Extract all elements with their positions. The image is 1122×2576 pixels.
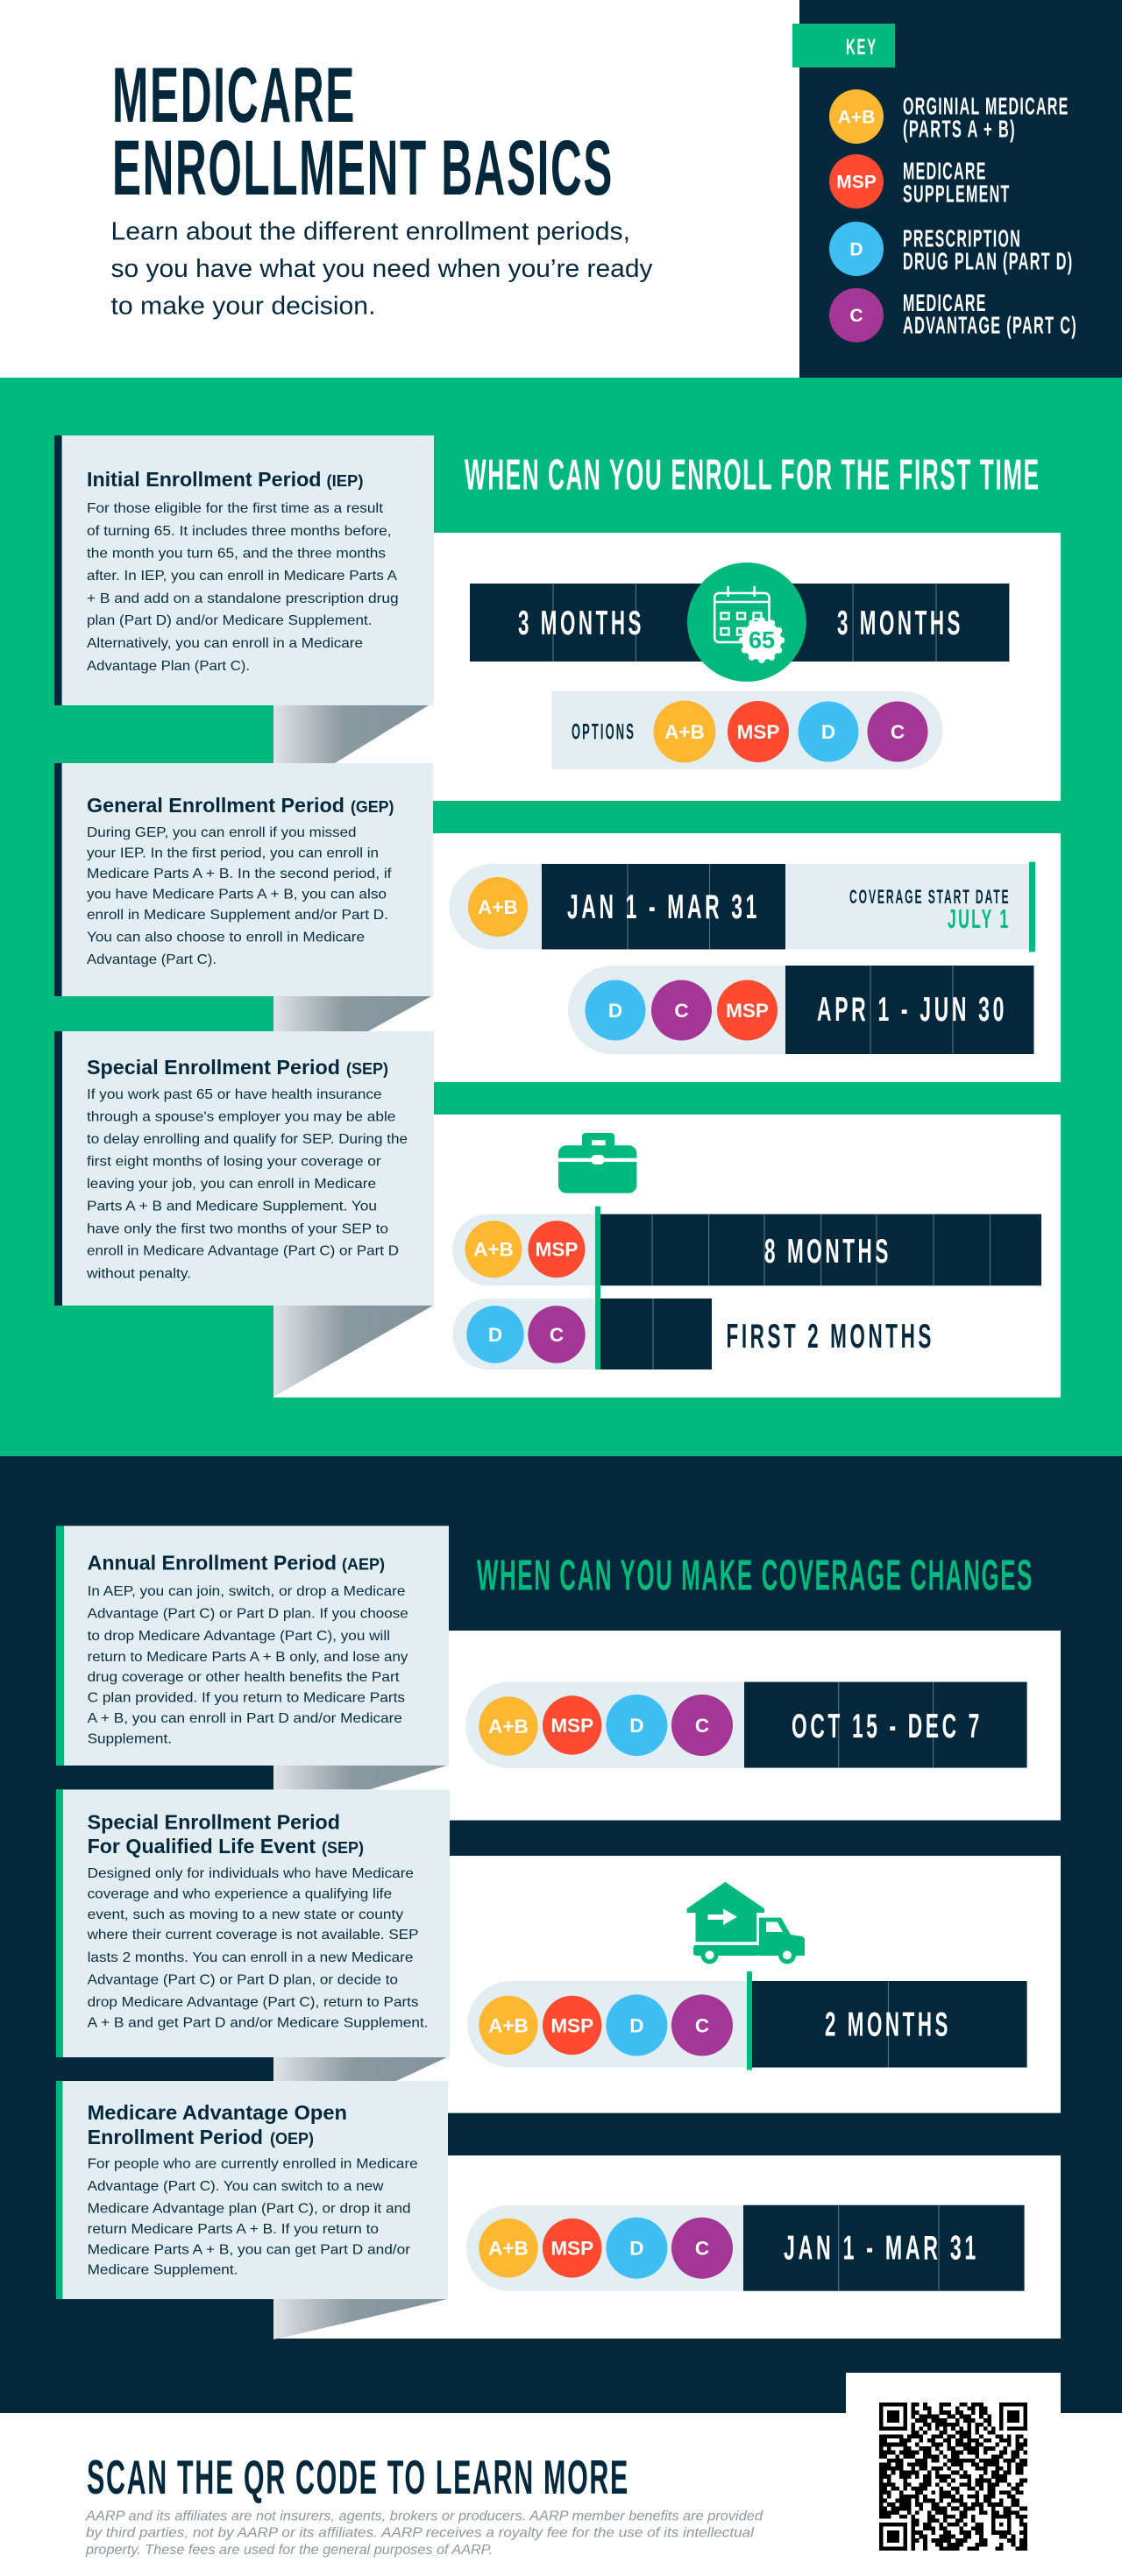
card: Special Enrollment Period (54, 1031, 434, 1306)
row: all plans Oct 15 to Dec 7: A+B (488, 1716, 529, 1737)
card body: drop Medicare Advantage (Part C), return to Parts (88, 1995, 419, 2010)
card body: + B and add on a standalone prescription drug (87, 591, 399, 606)
card: Medicare Advantage Open Enrollment Period (56, 2081, 448, 2299)
card body: drug coverage or other health benefits the Part (88, 1670, 400, 1685)
key item: medicare advantage (829, 288, 1077, 343)
card body: return Medicare Parts A + B. If you return to (88, 2222, 379, 2237)
card body: Advantage (Part C). You can switch to a new (88, 2179, 384, 2194)
card heading: General Enrollment Period (87, 794, 344, 817)
card body: Alternatively, you can enroll in a Medicare (87, 636, 363, 651)
row: all plans 2 months: 2 MONTHS (825, 2006, 951, 2044)
title: MEDICARE (112, 52, 356, 138)
coverage start date: JULY 1 (948, 903, 1010, 934)
card heading: Enrollment Period (88, 2126, 263, 2148)
options pill: D (821, 721, 835, 743)
card heading (88, 1810, 364, 1858)
row: A+B Jan 1 to Mar 31: JAN 1 - MAR 31 (567, 888, 760, 926)
intro text: to make your decision. (110, 293, 375, 321)
row: D C MSP Apr 1 to Jun 30: D (608, 1000, 622, 1022)
card heading (88, 2101, 347, 2148)
title (112, 52, 614, 211)
card body (87, 501, 399, 674)
card heading: (IEP) (326, 471, 363, 490)
card body: return to Medicare Parts A + B only, and lose any (88, 1650, 408, 1665)
disclaimer: AARP and its affiliates are not insurers, agents, brokers or producers. AARP member benefits are provided (85, 2509, 763, 2523)
row: D C MSP Apr 1 to Jun 30: C (674, 1000, 689, 1022)
card body: In AEP, you can join, switch, or drop a Medicare (88, 1584, 405, 1599)
row: A+B MSP 8 months: 8 MONTHS (764, 1233, 891, 1270)
card body: Parts A + B and Medicare Supplement. You (87, 1200, 377, 1214)
card body (87, 1866, 429, 2031)
card heading: Annual Enrollment Period (88, 1551, 337, 1574)
row: D C first 2 months (452, 1299, 934, 1369)
row: all plans Jan 1 to Mar 31: MSP (550, 2238, 593, 2260)
bar: 3 months either side: 3 MONTHS (837, 605, 963, 642)
card body: have only the first two months of your SEP to (87, 1221, 388, 1236)
card body: through a spouse's employer you may be able (87, 1109, 395, 1124)
row: A+B MSP 8 months: A+B (473, 1239, 514, 1260)
disclaimer: property. These fees are used for the general purposes of AARP. (85, 2543, 493, 2558)
fold shadow: AEP card (273, 1766, 447, 1789)
card body: If you work past 65 or have health insurance (87, 1087, 381, 1102)
card body: after. In IEP, you can enroll in Medicare Parts A (87, 569, 398, 584)
panel: qualified life event chart (273, 1856, 1061, 2113)
fold shadow: IEP card (273, 705, 429, 763)
key item: prescription drug plan: D (849, 240, 863, 259)
card heading: (OEP) (270, 2129, 314, 2148)
key item: medicare supplement: SUPPLEMENT (903, 180, 1011, 208)
card body: Medicare Parts A + B, you can get Part D and/or (88, 2242, 410, 2257)
key tab (792, 24, 895, 67)
key item: original medicare: (PARTS A + B) (903, 116, 1016, 143)
card body: Advantage (Part C) or Part D plan. If you choose (88, 1607, 408, 1621)
card body: where their current coverage is not available. SEP (87, 1928, 418, 1943)
row: A+B Jan 1 to Mar 31 (449, 862, 1035, 952)
card body: Designed only for individuals who have Medicare (88, 1866, 414, 1881)
panel: IEP chart (273, 533, 1061, 801)
card body: enroll in Medicare Supplement and/or Part D. (87, 908, 388, 923)
row: all plans Jan 1 to Mar 31: JAN 1 - MAR 31 (784, 2230, 979, 2268)
panel: OEP chart (273, 2155, 1061, 2339)
card body: plan (Part D) and/or Medicare Supplement. (87, 613, 372, 628)
card body: Advantage Plan (Part C). (87, 659, 250, 674)
card heading: Special Enrollment Period (88, 1810, 340, 1833)
card body: to delay enrolling and qualify for SEP. During the (87, 1132, 408, 1147)
intro text (110, 217, 653, 321)
disclaimer: by third parties, not by AARP or its affiliates. AARP receives a royalty fee for the use of its intellectual (86, 2526, 754, 2541)
card heading: (SEP) (322, 1838, 364, 1857)
row: all plans Oct 15 to Dec 7: D (629, 1715, 644, 1737)
panel: AEP chart (273, 1631, 1061, 1821)
row: all plans Jan 1 to Mar 31: A+B (488, 2238, 529, 2260)
row: all plans 2 months: D (629, 2014, 644, 2036)
row: A+B MSP 8 months: MSP (536, 1239, 578, 1260)
row: all plans 2 months: A+B (488, 2014, 529, 2036)
card body: enroll in Medicare Advantage (Part C) or Part D (87, 1244, 399, 1259)
card body: lasts 2 months. You can enroll in a new Medicare (88, 1950, 413, 1965)
card: Special Enrollment Period for Qualified Life Event (56, 1789, 450, 2057)
card body: first eight months of losing your coverage or (87, 1155, 381, 1170)
panel: GEP chart (273, 833, 1061, 1082)
card body: Medicare Parts A + B. In the second period, if (87, 867, 392, 881)
row: A+B Jan 1 to Mar 31: A+B (478, 896, 518, 918)
row: all plans Oct 15 to Dec 7: MSP (550, 1715, 593, 1737)
row: D C MSP Apr 1 to Jun 30: MSP (726, 1000, 769, 1022)
icon: briefcase (558, 1133, 636, 1193)
key item: medicare advantage: MEDICARE (903, 289, 987, 316)
card: Annual Enrollment Period (56, 1526, 449, 1766)
row: A+B MSP 8 months (452, 1214, 1041, 1285)
fold shadow: OEP card (273, 2299, 447, 2339)
footer heading: SCAN THE QR CODE TO LEARN MORE (87, 2450, 629, 2504)
card heading: (SEP) (346, 1059, 388, 1078)
panel: key (792, 0, 1122, 378)
options pill: OPTIONS (572, 720, 636, 745)
row: all plans 2 months: C (695, 2014, 709, 2036)
intro text: Learn about the different enrollment periods, (110, 217, 630, 245)
card body: your IEP. In the first period, you can enroll in (87, 846, 379, 860)
card body (87, 825, 392, 967)
intro text: so you have what you need when you’re ready (110, 255, 653, 283)
row: all plans Oct 15 to Dec 7: OCT 15 - DEC 7 (792, 1708, 983, 1745)
card body: During GEP, you can enroll if you missed (87, 825, 356, 840)
key item: prescription drug plan: PRESCRIPTION (903, 225, 1021, 252)
icon: moving truck (687, 1882, 805, 1964)
fold shadow: SEP card (273, 1306, 433, 1397)
card heading: (GEP) (351, 797, 394, 816)
key tab: KEY (846, 36, 877, 60)
bar: 3 months either side: 3 MONTHS (518, 605, 644, 642)
key item: medicare supplement: MEDICARE (903, 157, 987, 184)
card body: Advantage (Part C) or Part D plan, or decide to (88, 1973, 398, 1987)
card body: the month you turn 65, and the three months (87, 547, 386, 561)
row: all plans Jan 1 to Mar 31: D (629, 2238, 644, 2260)
card: Initial Enrollment Period (54, 435, 434, 705)
QR code panel (846, 2373, 1061, 2576)
card body: of turning 65. It includes three months before, (87, 524, 391, 539)
key item: prescription drug plan (829, 222, 1073, 276)
fold shadow: qualified life event card (273, 2057, 447, 2081)
row: all plans 2 months (467, 1971, 1027, 2070)
row: D C first 2 months: D (488, 1324, 502, 1346)
row: all plans Jan 1 to Mar 31 (466, 2205, 1025, 2291)
row: D C MSP Apr 1 to Jun 30 (568, 966, 1034, 1054)
key item: medicare supplement: MSP (836, 172, 877, 193)
disclaimer (85, 2509, 763, 2558)
card heading: (AEP) (342, 1554, 385, 1573)
row: all plans Oct 15 to Dec 7 (465, 1682, 1027, 1768)
card body: without penalty. (86, 1266, 191, 1281)
key item: medicare supplement (829, 154, 1011, 209)
key item: original medicare: A+B (838, 107, 875, 128)
options pill: C (891, 721, 905, 743)
title: ENROLLMENT BASICS (112, 124, 614, 211)
card body: C plan provided. If you return to Medicare Parts (88, 1690, 405, 1705)
card body: to drop Medicare Advantage (Part C), you will (88, 1629, 390, 1644)
coverage start date (849, 886, 1010, 934)
key item: original medicare (829, 89, 1069, 144)
card body: leaving your job, you can enroll in Medicare (87, 1177, 376, 1192)
card body: A + B, you can enroll in Part D and/or Medicare (88, 1711, 402, 1726)
bar: 3 months either side (470, 584, 1009, 662)
row: D C first 2 months: C (550, 1324, 564, 1346)
section: coverage changes (0, 1456, 1122, 2413)
card body: A + B and get Part D and/or Medicare Supplement. (88, 2015, 429, 2031)
card heading: Special Enrollment Period (87, 1056, 340, 1079)
options pill (552, 691, 943, 769)
row: all plans 2 months: MSP (550, 2014, 593, 2036)
card: General Enrollment Period (54, 763, 433, 996)
card body (88, 2156, 418, 2278)
options pill: A+B (664, 721, 705, 743)
fold shadow: GEP card (273, 996, 431, 1031)
options pill: MSP (737, 721, 779, 743)
card heading: Medicare Advantage Open (88, 2101, 347, 2124)
icon: calendar 65 (687, 563, 806, 682)
key item: medicare advantage: C (849, 306, 863, 326)
row: all plans Oct 15 to Dec 7: C (695, 1715, 709, 1737)
row: all plans Jan 1 to Mar 31: C (695, 2238, 709, 2260)
icon: calendar 65: 65 (749, 627, 775, 654)
card body: event, such as moving to a new state or county (88, 1907, 403, 1922)
card body: you have Medicare Parts A + B, you can also (87, 887, 387, 902)
card body: For people who are currently enrolled in Medicare (88, 2156, 418, 2171)
card body: Advantage (Part C). (87, 952, 217, 967)
panel: SEP chart (273, 1115, 1061, 1398)
card heading: Initial Enrollment Period (87, 468, 321, 491)
QR code (879, 2404, 1027, 2549)
card body: For those eligible for the first time as a result (87, 501, 384, 516)
card body: You can also choose to enroll in Medicare (87, 931, 365, 945)
card body (86, 1087, 408, 1281)
card body: Medicare Advantage plan (Part C), or drop it and (88, 2202, 411, 2217)
card heading: For Qualified Life Event (88, 1835, 316, 1858)
card body: Medicare Supplement. (88, 2263, 238, 2278)
card body: coverage and who experience a qualifying life (88, 1887, 392, 1901)
card body (88, 1584, 408, 1746)
card body: Supplement. (88, 1731, 172, 1746)
row: D C first 2 months: FIRST 2 MONTHS (726, 1318, 934, 1355)
section: first-time enrollment (0, 378, 1122, 1456)
